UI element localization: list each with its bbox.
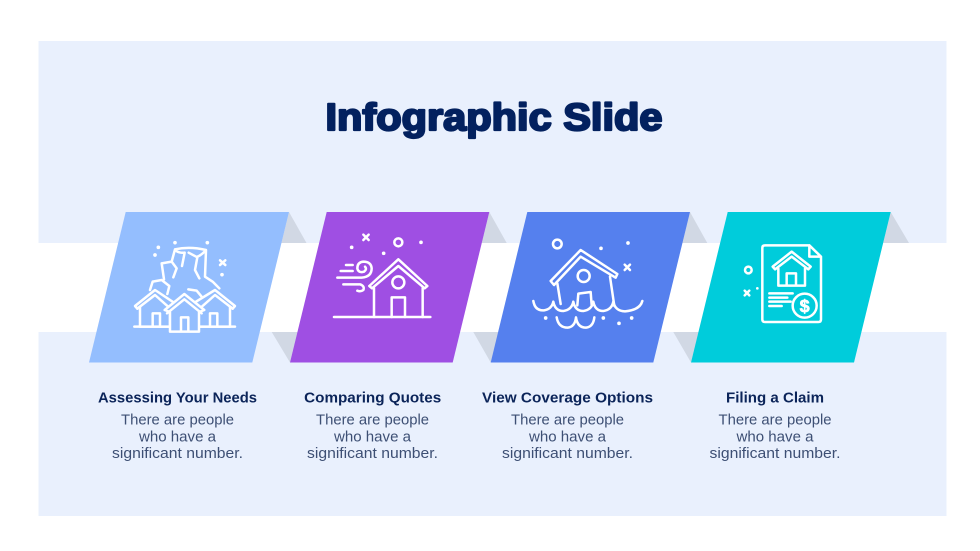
step description bbox=[112, 412, 243, 462]
fold shadows bbox=[272, 212, 507, 362]
step description: significant number. bbox=[502, 446, 633, 462]
step heading: Assessing Your Needs bbox=[98, 390, 257, 406]
card bbox=[691, 212, 891, 362]
step heading: Comparing Quotes bbox=[304, 390, 441, 406]
step heading: View Coverage Options bbox=[482, 390, 653, 406]
step heading: Filing a Claim bbox=[726, 390, 824, 406]
icon: insurance document: $ bbox=[800, 296, 810, 316]
title: Infographic Slide bbox=[326, 97, 662, 139]
icon: insurance document bbox=[745, 245, 821, 322]
fold shadow bbox=[281, 212, 306, 243]
step description: There are people bbox=[718, 412, 832, 428]
step description bbox=[710, 412, 840, 462]
step 3: view coverage options bbox=[473, 212, 707, 462]
step 4: filing a claim bbox=[673, 212, 909, 462]
icon: house in wind bbox=[334, 235, 430, 317]
icon: houses below a rock bbox=[134, 241, 235, 332]
step description bbox=[502, 412, 633, 462]
step 1: assessing your needs bbox=[89, 212, 306, 462]
panel: background bbox=[38, 41, 946, 516]
step description: who have a bbox=[528, 430, 607, 446]
step description: significant number. bbox=[710, 446, 840, 462]
fold shadows bbox=[473, 212, 707, 362]
white horizontal band bbox=[38, 243, 946, 332]
step description: who have a bbox=[138, 430, 217, 446]
step 2: comparing quotes bbox=[272, 212, 507, 462]
icon: flooded house bbox=[533, 240, 642, 328]
step description: significant number. bbox=[307, 446, 438, 462]
step description: There are people bbox=[316, 412, 429, 428]
card bbox=[290, 212, 489, 362]
card bbox=[491, 212, 690, 362]
step description: significant number. bbox=[112, 446, 243, 462]
fold shadows bbox=[673, 212, 909, 362]
step description: There are people bbox=[511, 412, 624, 428]
step description: There are people bbox=[121, 412, 234, 428]
step description: who have a bbox=[735, 430, 814, 446]
step description bbox=[307, 412, 438, 462]
card bbox=[89, 212, 289, 362]
step description: who have a bbox=[333, 430, 412, 446]
